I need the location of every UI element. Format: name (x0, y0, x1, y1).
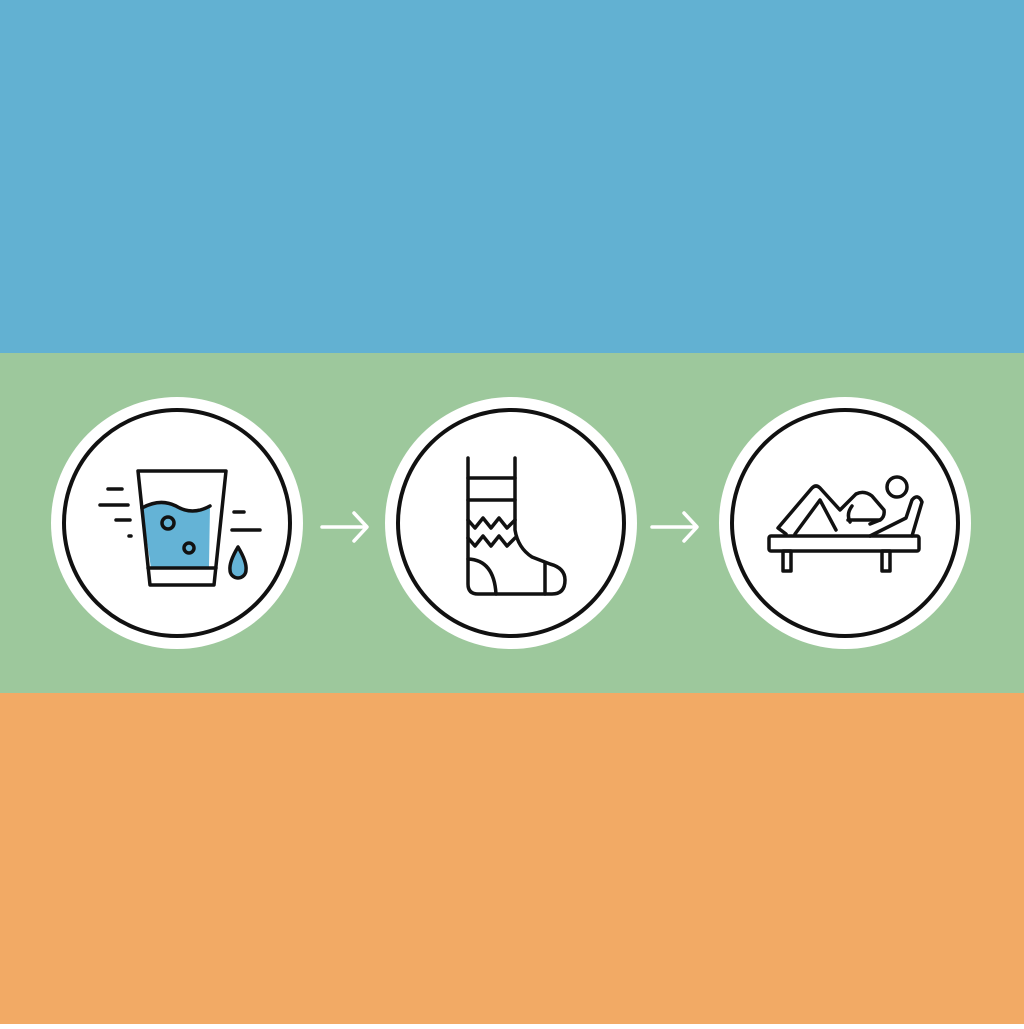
panel: compression sock circle (385, 397, 637, 649)
arrow 2 (652, 513, 697, 541)
icon: person lying on lounger (769, 477, 922, 571)
icon: glass of water (100, 471, 260, 585)
band: orange bottom (0, 693, 1024, 1024)
band: green middle (0, 353, 1024, 693)
panel: water glass circle (51, 397, 303, 649)
arrow 1 (322, 513, 367, 541)
band: blue top (0, 0, 1024, 353)
panel: resting person circle (719, 397, 971, 649)
icon: sock (468, 458, 565, 594)
